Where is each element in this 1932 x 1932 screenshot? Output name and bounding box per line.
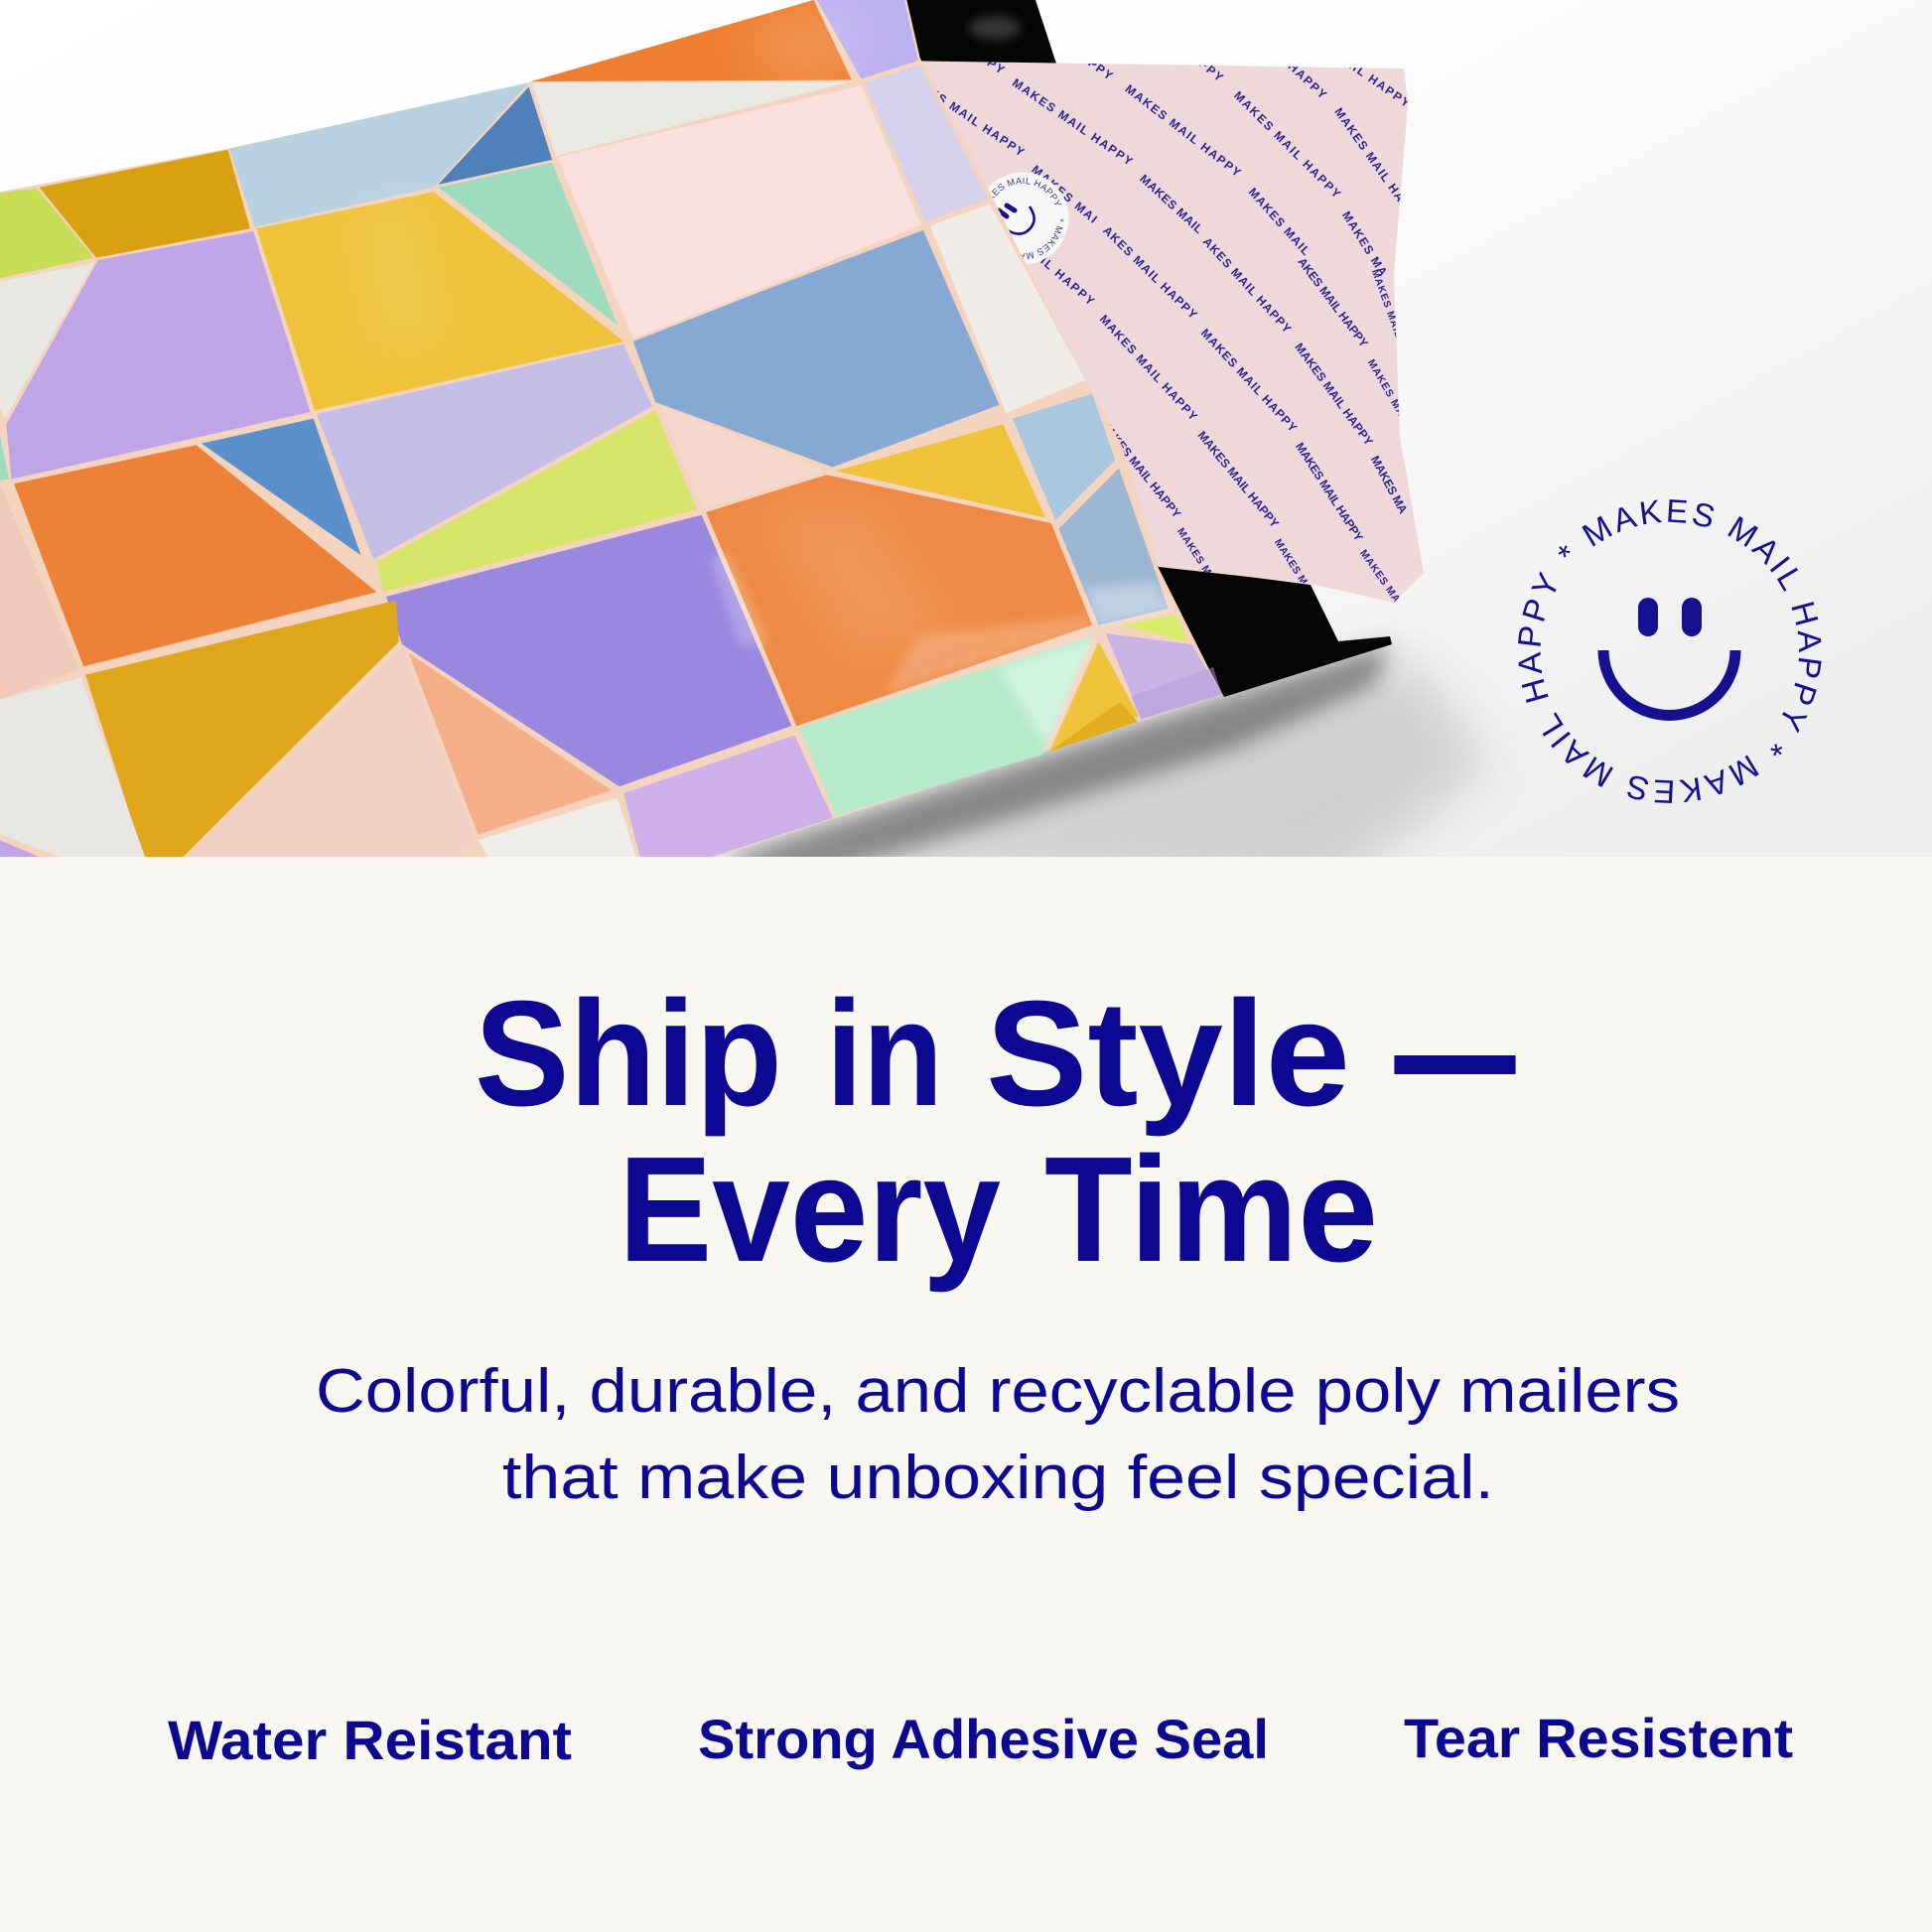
title: Every [619,1125,1001,1293]
repeating diagonal slogan: AKES MAIL HAPPY [1100,223,1200,322]
title: Ship [475,969,782,1137]
repeating diagonal slogan: MAKES MA [1174,526,1218,585]
repeating diagonal slogan: MAKES MAIL HAPPY [1293,440,1366,544]
title [475,969,1514,1293]
mailer base with peach grout lines [0,0,1222,868]
title: in [826,969,943,1137]
colourful geometric mailer [0,0,1222,868]
repeating diagonal slogan: MAKES MA [1368,454,1411,516]
pink inner mailer [894,61,1424,603]
repeating diagonal slogan: IL HAPPY [1037,254,1097,308]
repeating diagonal slogan: MAKES MAIL [1246,185,1312,258]
repeating diagonal slogan: AKES MAIL HAPPY [1200,234,1294,336]
repeating diagonal slogan: MAKES MAIL HAPPY [1292,341,1376,448]
repeating diagonal slogan [937,62,1408,602]
title: Style [986,969,1350,1137]
logo: round smiley badge [1518,499,1821,803]
repeating diagonal slogan: MAKES MAIL HAPPY [1287,16,1413,110]
repeating diagonal slogan: MAKES MAIL [1365,357,1413,428]
feature: adhesive seal: Strong Adhesive Seal [698,1708,1269,1770]
repeating diagonal slogan: MAKES MAIL HAPPY [1195,429,1282,530]
badge smile [1603,650,1735,715]
badge right eye [1682,598,1702,636]
black backing flap top [898,0,1056,64]
repeating diagonal slogan: MAKES MAIL HAPPY [900,68,1027,159]
repeating diagonal slogan: MAKES MAIL HAPPY [1123,81,1244,180]
lower copy panel [0,857,1932,1932]
sticker ring text: * MAKES MAIL HAPPY * MAKES MAIL HAPPY [992,177,1064,260]
subtitle: Colorful, durable, and recyclable poly mailers [316,1357,1680,1426]
badge ring text: * MAKES MAIL HAPPY * MAKES MAIL HAPPY [1518,499,1821,803]
tight contact shadow under mailer [715,643,1390,884]
hero photo panel [0,0,1932,857]
subtitle [316,1357,1680,1512]
sticker smile [1008,207,1035,234]
repeating diagonal slogan: MAKES MA [1272,537,1314,594]
repeating diagonal slogan: MAKES MAIL HAPPY [1198,326,1300,435]
subtitle: that make unboxing feel special. [502,1444,1494,1512]
feature: tear resistant: Tear Resistent [1404,1707,1793,1769]
black backing flap bottom [969,16,1392,697]
repeating diagonal slogan: MAKES MAI [1029,163,1100,226]
broad soft shadow under mailer [735,655,1489,894]
repeating diagonal slogan: MAKES MAIL [1137,172,1205,236]
feature: water resistant: Water Reistant [168,1709,572,1771]
title: Time [1044,1125,1378,1293]
geometric colour panes [0,0,1221,868]
repeating diagonal slogan: AKES MAIL HAPPY [1295,255,1371,349]
repeating diagonal slogan: MAKES MAIL HAPPY [1097,312,1200,423]
repeating diagonal slogan: MAKES MAIL HAPPY [1097,417,1183,520]
repeating diagonal slogan: MAKES MAIL [1369,268,1404,340]
title: — [1396,969,1514,1137]
sticker eyes [999,206,1015,216]
repeating diagonal slogan: MAKES MA [1357,548,1403,606]
badge left eye [1638,598,1658,636]
repeating diagonal slogan: MAKES MA [1339,208,1390,279]
repeating diagonal slogan: MAKES MAIL HAPPY [1231,88,1343,201]
repeating diagonal slogan: MAKES MAIL HAPPY [1010,75,1136,169]
glossy highlights and folds [347,0,1222,752]
repeating diagonal slogan: MAKES MAIL HAPPY [1331,105,1423,226]
sticker: smiley seal [988,173,1068,264]
